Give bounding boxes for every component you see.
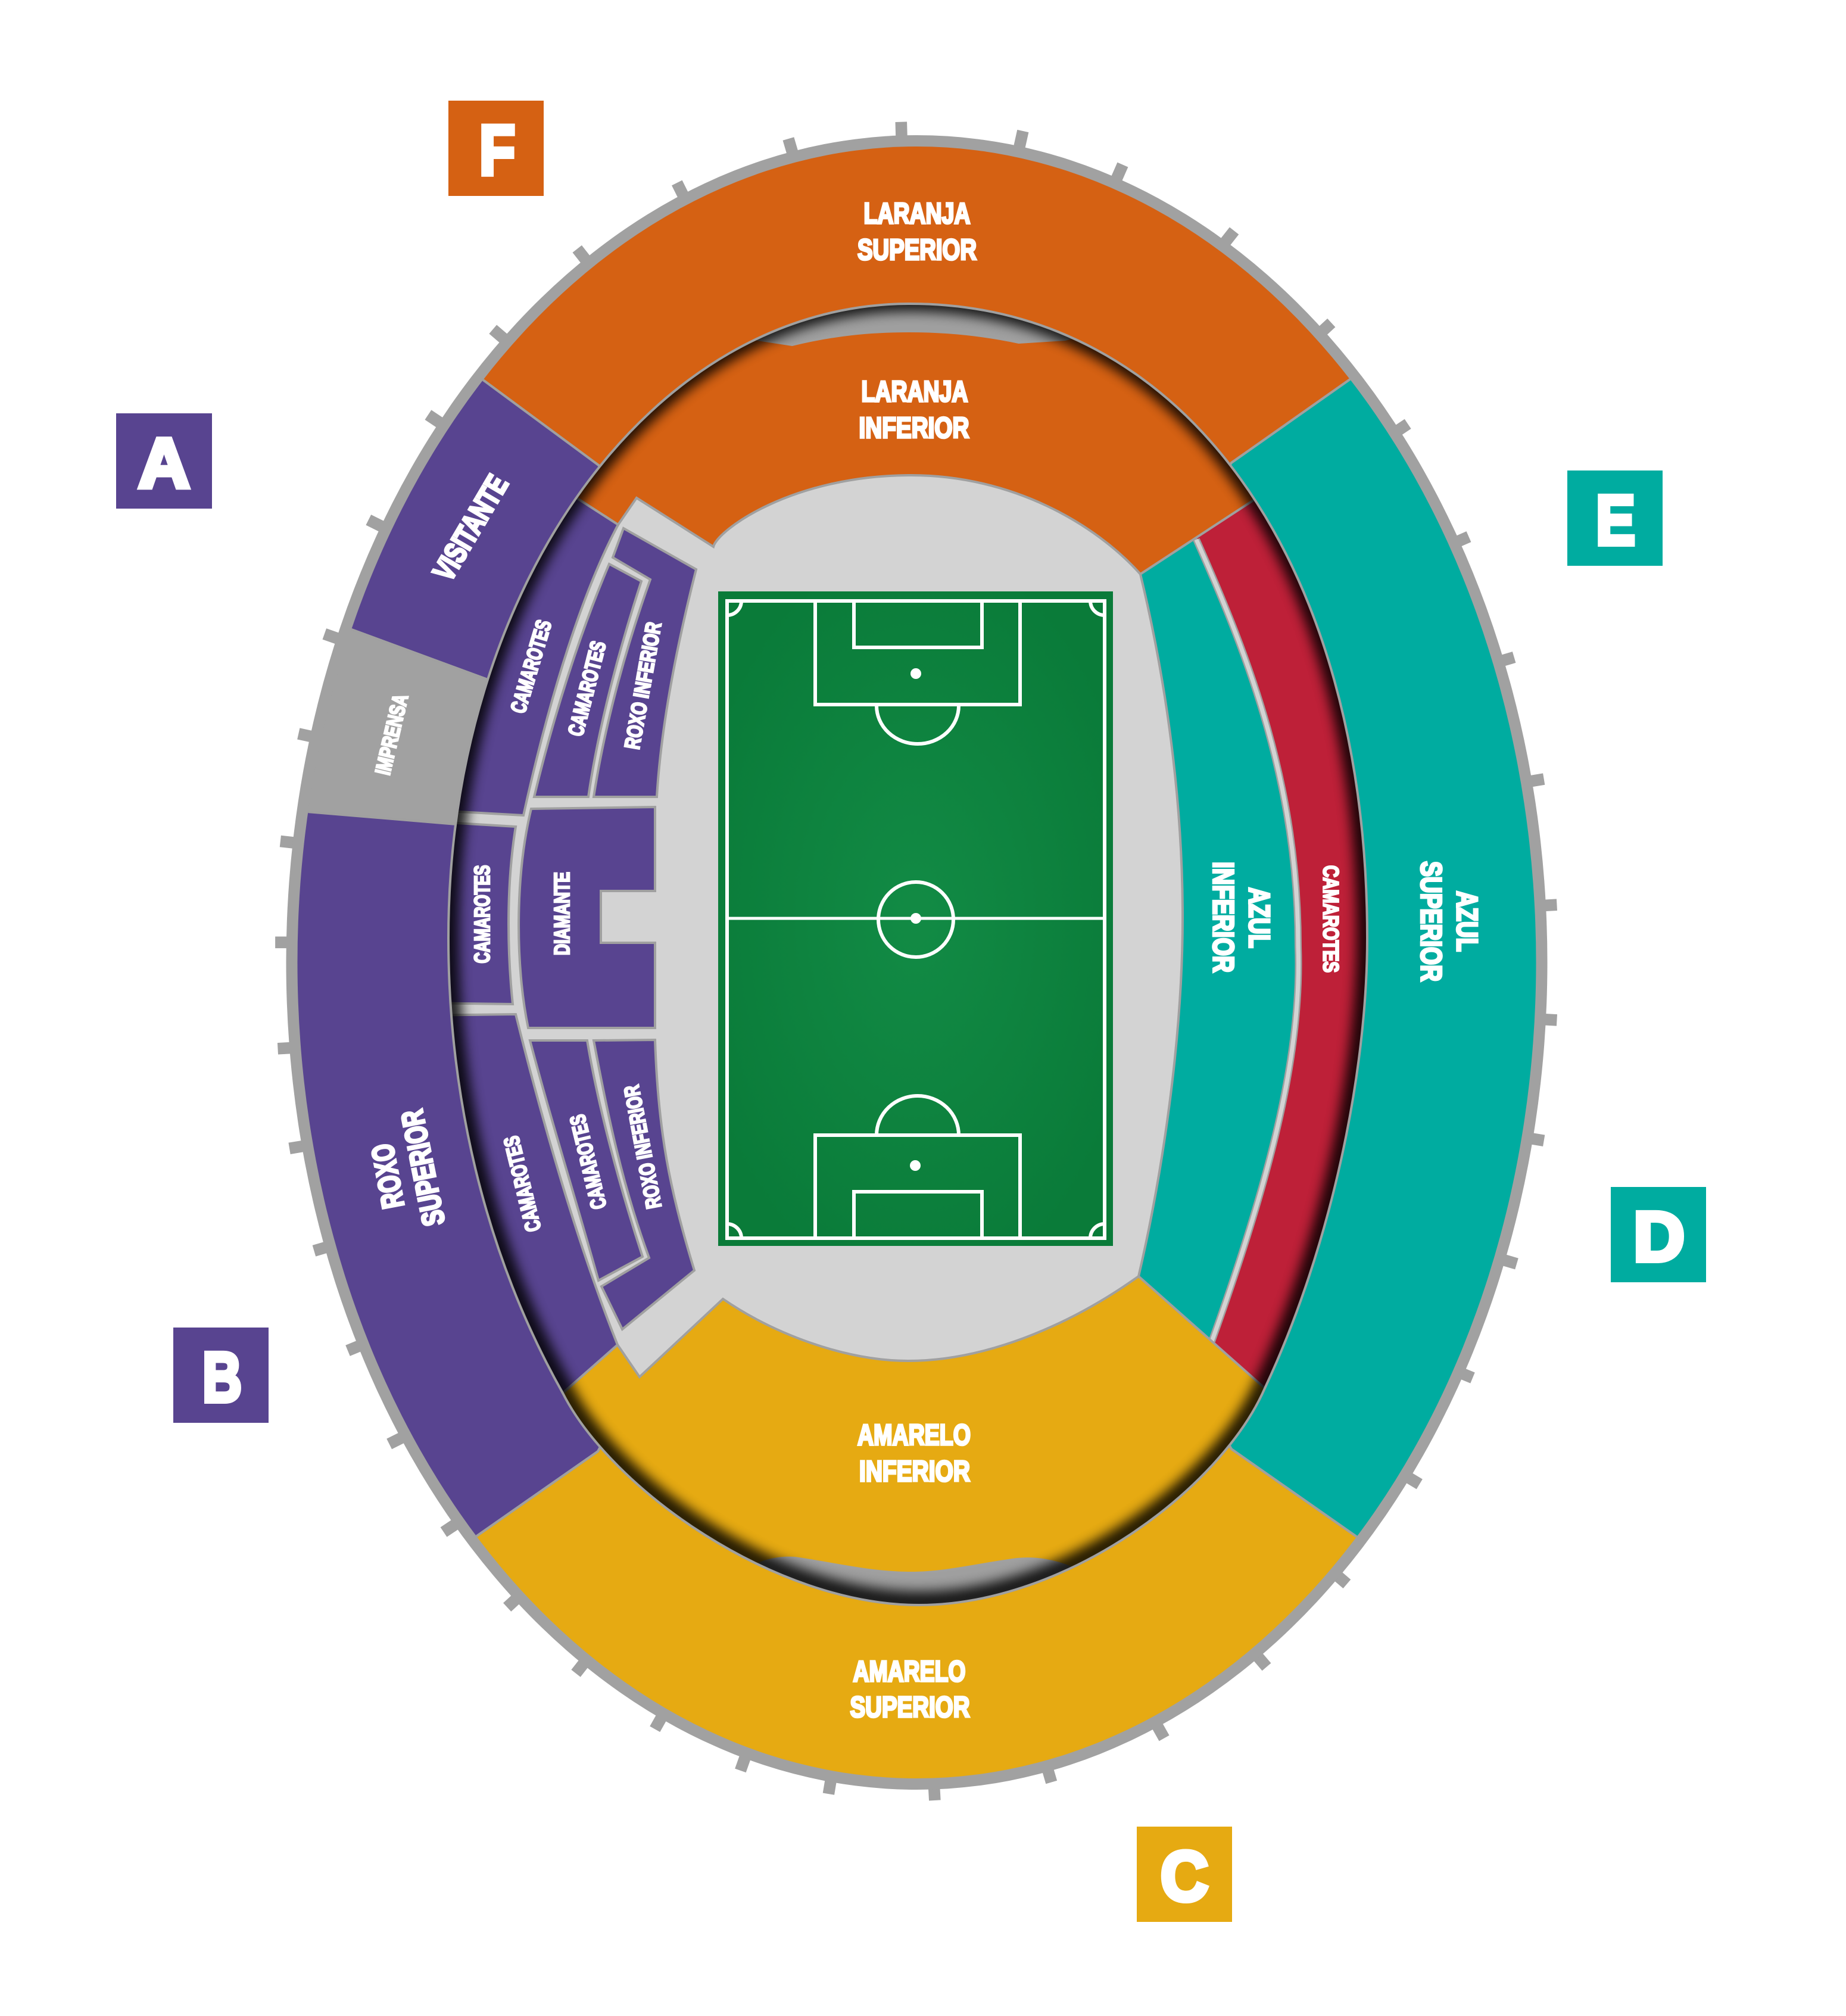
label: visitante: VISITANTE [426, 469, 515, 587]
badge E: E [1596, 481, 1635, 560]
label: azul inferior: AZUL [1243, 887, 1275, 948]
sector: laranja inferior [417, 238, 1429, 574]
section: diamante [519, 807, 655, 1028]
label: laranja superior: LARANJA [863, 198, 971, 230]
divider: azul and camarotes [1196, 540, 1299, 1341]
badge C [1137, 1827, 1232, 1922]
label: imprensa: IMPRENSA [370, 691, 413, 777]
section: roxo inferior lower [594, 1040, 694, 1329]
label: amarelo superior [850, 1656, 969, 1724]
label: laranja superior: SUPERIOR [857, 234, 977, 266]
sector: imprensa [351, 628, 487, 678]
badge E [1567, 470, 1663, 566]
sector: amarelo superior [476, 1447, 1357, 1778]
label: diamante: DIAMANTE [550, 872, 574, 955]
label: azul inferior [1206, 862, 1275, 973]
label: camarotes middle: CAMAROTES [470, 865, 494, 964]
outer grey ring [286, 135, 1547, 1790]
badge B [173, 1328, 269, 1423]
label: azul superior: AZUL [1451, 891, 1483, 952]
label: azul inferior: INFERIOR [1206, 862, 1239, 973]
label: roxo superior [365, 1107, 452, 1229]
label: roxo inferior lower: ROXO INFERIOR [619, 1083, 666, 1211]
sector: laranja superior [483, 147, 1350, 465]
lower bowl outline [448, 304, 1367, 1605]
section: roxo inferior upper [594, 528, 696, 797]
label: camarotes upper inner: CAMAROTES [563, 638, 610, 739]
badge A: A [138, 424, 189, 503]
label: azul superior [1415, 861, 1483, 981]
section: camarotes upper inner [534, 564, 641, 797]
label: amarelo superior: SUPERIOR [850, 1691, 969, 1724]
section: camarotes middle [417, 821, 516, 1004]
sector: azul superior [1229, 379, 1536, 1538]
upper level sectors [298, 147, 1536, 1778]
label: amarelo inferior: INFERIOR [859, 1456, 970, 1488]
badge A [116, 413, 212, 509]
sector: amarelo inferior [417, 1276, 1429, 1727]
football pitch [718, 591, 1113, 1246]
sector: camarotes vermelho [1197, 501, 1366, 1386]
label: roxo inferior upper: ROXO INFERIOR [620, 620, 666, 751]
label: laranja inferior: INFERIOR [859, 412, 969, 444]
label: roxo superior: ROXO [365, 1141, 411, 1211]
sector: roxo superior [298, 812, 599, 1535]
label: amarelo superior: AMARELO [853, 1656, 966, 1688]
label: laranja superior [857, 198, 977, 266]
section: camarotes lower outer [417, 1014, 618, 1522]
badge C: C [1161, 1837, 1208, 1916]
label: laranja inferior [859, 376, 969, 444]
badge B: B [202, 1338, 242, 1417]
label: camarotes lower outer: CAMAROTES [499, 1133, 545, 1234]
lower bowl [450, 305, 1366, 1604]
label: roxo superior: SUPERIOR [395, 1107, 452, 1229]
stadium seating map [116, 101, 1706, 1922]
badge F [448, 101, 544, 196]
label: camarotes lower inner: CAMAROTES [565, 1112, 611, 1211]
label: amarelo inferior [857, 1419, 971, 1488]
sector: azul inferior [1139, 536, 1299, 1358]
badge D: D [1633, 1198, 1685, 1276]
purple sections [417, 395, 696, 1522]
badge F: F [479, 111, 515, 190]
label: camarotes upper outer: CAMAROTES [506, 617, 556, 716]
label: azul superior: SUPERIOR [1415, 861, 1447, 981]
sector: visitante [351, 379, 600, 678]
ring ticks [275, 122, 1557, 1800]
section: camarotes lower inner [530, 1040, 643, 1280]
section: camarotes upper outer [417, 395, 618, 815]
badge D [1611, 1187, 1706, 1282]
label: amarelo inferior: AMARELO [857, 1419, 971, 1451]
inner shadow [448, 301, 1367, 1602]
label: laranja inferior: LARANJA [861, 376, 968, 408]
label: camarotes direita: CAMAROTES [1318, 865, 1343, 973]
